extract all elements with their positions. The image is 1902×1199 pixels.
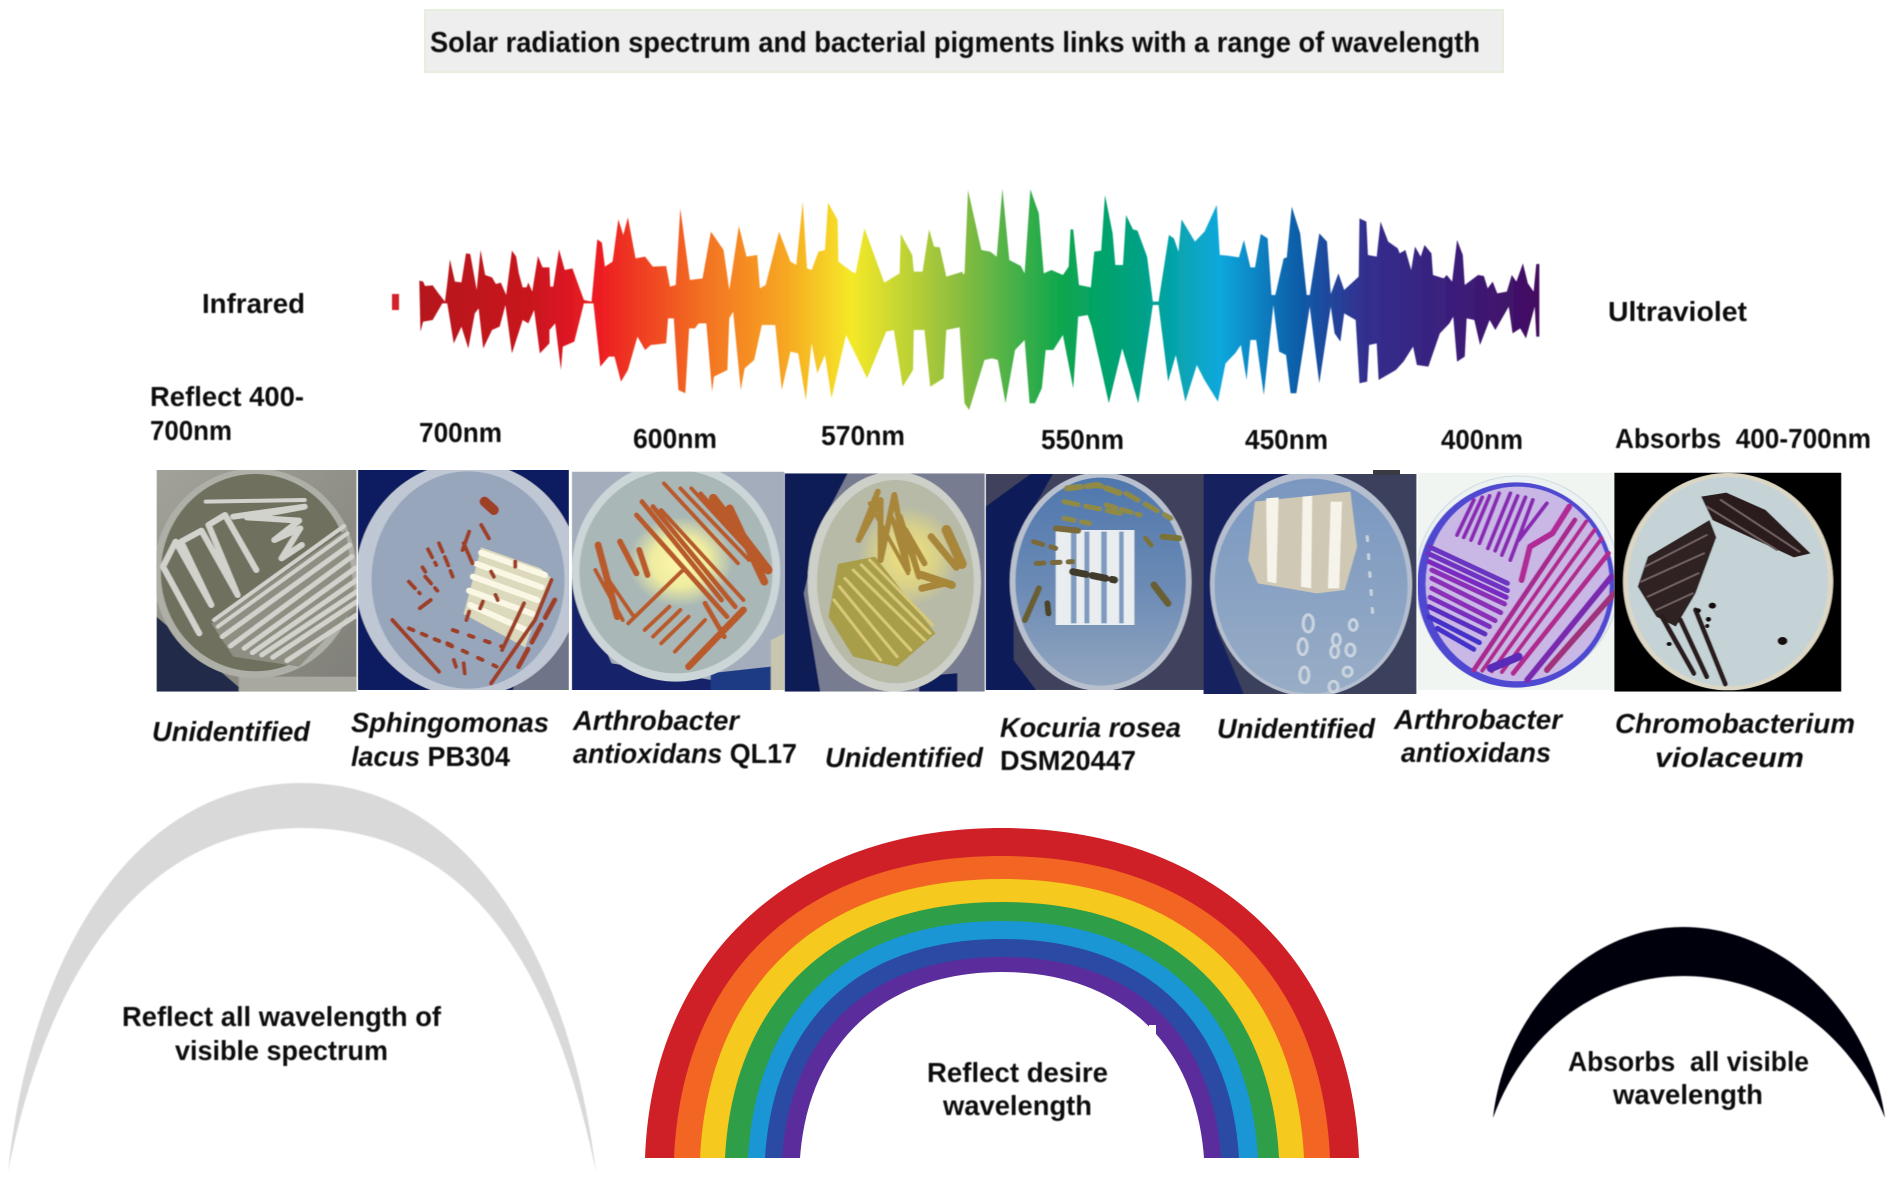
species label: Arthrobacter antioxidans — [1393, 704, 1564, 768]
species label: Sphingomonas lacus PB304: Sphingomonas — [351, 707, 549, 738]
wavelength label 450nm: 450nm — [1245, 424, 1328, 455]
text: absorbs all visible wavelength: wavelength — [1612, 1079, 1763, 1110]
text: reflect desire wavelength: wavelength — [942, 1090, 1092, 1121]
species label: Kocuria rosea DSM20447: Kocuria rosea — [1000, 712, 1181, 743]
species label: Unidentified (dish 1): Unidentified — [152, 716, 311, 747]
rainbow arc: reflects desired wavelength — [645, 828, 1359, 1158]
gray crescent arc: reflects all wavelengths — [8, 783, 596, 1172]
species label: Unidentified (dish 4): Unidentified — [825, 742, 984, 773]
solar radiation spectrum waveform — [392, 180, 1542, 420]
petri dish 1: white unidentified — [154, 468, 357, 692]
text: absorbs all visible wavelength: Absorbs all visible — [1568, 1046, 1809, 1077]
species label: Kocuria rosea DSM20447: DSM20447 — [1000, 745, 1136, 776]
species label: Sphingomonas lacus PB304 — [351, 707, 549, 772]
species label: Sphingomonas lacus PB304: lacus PB304 — [351, 741, 510, 772]
ultraviolet label: Ultraviolet — [1608, 296, 1747, 327]
text: reflect all wavelength: Reflect all wavelength of — [122, 1001, 442, 1032]
petri dish 8: Chromobacterium violaceum — [1614, 473, 1841, 692]
black crescent arc: absorbs all visible — [1493, 927, 1885, 1118]
reflect 400-700nm label — [150, 381, 304, 446]
reflect 400-700nm label: Reflect 400- — [150, 381, 304, 412]
species label: Arthrobacter antioxidans QL17: antioxidans QL17 — [573, 738, 797, 769]
small dark bar above dish 6 — [1373, 470, 1400, 475]
wavelength label 550nm: 550nm — [1041, 424, 1124, 455]
species label: Arthrobacter antioxidans QL17: Arthrobacter — [572, 705, 741, 736]
text: reflect desire wavelength — [927, 1057, 1108, 1121]
text: reflect desire wavelength: Reflect desire — [927, 1057, 1108, 1088]
title banner: Solar radiation spectrum and bacterial pigments links with a range of wavelength — [430, 27, 1480, 59]
petri dish 6: unidentified pale colonies — [1203, 471, 1417, 697]
species label: Kocuria rosea DSM20447 — [1000, 712, 1181, 776]
wavelength label 700nm: 700nm — [419, 417, 502, 448]
petri dish 5: Kocuria rosea — [986, 472, 1204, 691]
petri dish 4: yellow unidentified — [785, 472, 985, 692]
species label: Arthrobacter antioxidans QL17 — [572, 705, 797, 769]
reflect 400-700nm label: 700nm — [150, 415, 232, 446]
text: reflect all wavelength: visible spectrum — [175, 1035, 388, 1066]
text: reflect all wavelength — [122, 1001, 442, 1066]
species label: Arthrobacter antioxidans: antioxidans — [1401, 737, 1551, 768]
species label: Arthrobacter antioxidans: Arthrobacter — [1393, 704, 1564, 735]
wavelength label 400nm: 400nm — [1441, 424, 1523, 455]
text: absorbs all visible wavelength — [1568, 1046, 1809, 1110]
infrared label: Infrared — [202, 288, 305, 319]
wavelength label 600nm: 600nm — [633, 423, 717, 454]
petri dish 2: Sphingomonas lacus — [358, 470, 569, 690]
species label: Chromobacterium violaceum: violaceum — [1655, 742, 1804, 773]
species label: Chromobacterium violaceum: Chromobacterium — [1615, 708, 1855, 739]
species label: Unidentified (dish 6): Unidentified — [1217, 713, 1376, 744]
petri dish 7: Arthrobacter antioxidans violet — [1415, 473, 1620, 690]
title banner — [425, 10, 1503, 72]
wavelength label 570nm: 570nm — [821, 420, 905, 451]
species label: Chromobacterium violaceum — [1615, 708, 1855, 773]
absorbs 400-700nm label: Absorbs 400-700nm — [1615, 423, 1871, 454]
petri dish 3: Arthrobacter antioxidans QL17 — [572, 462, 785, 690]
